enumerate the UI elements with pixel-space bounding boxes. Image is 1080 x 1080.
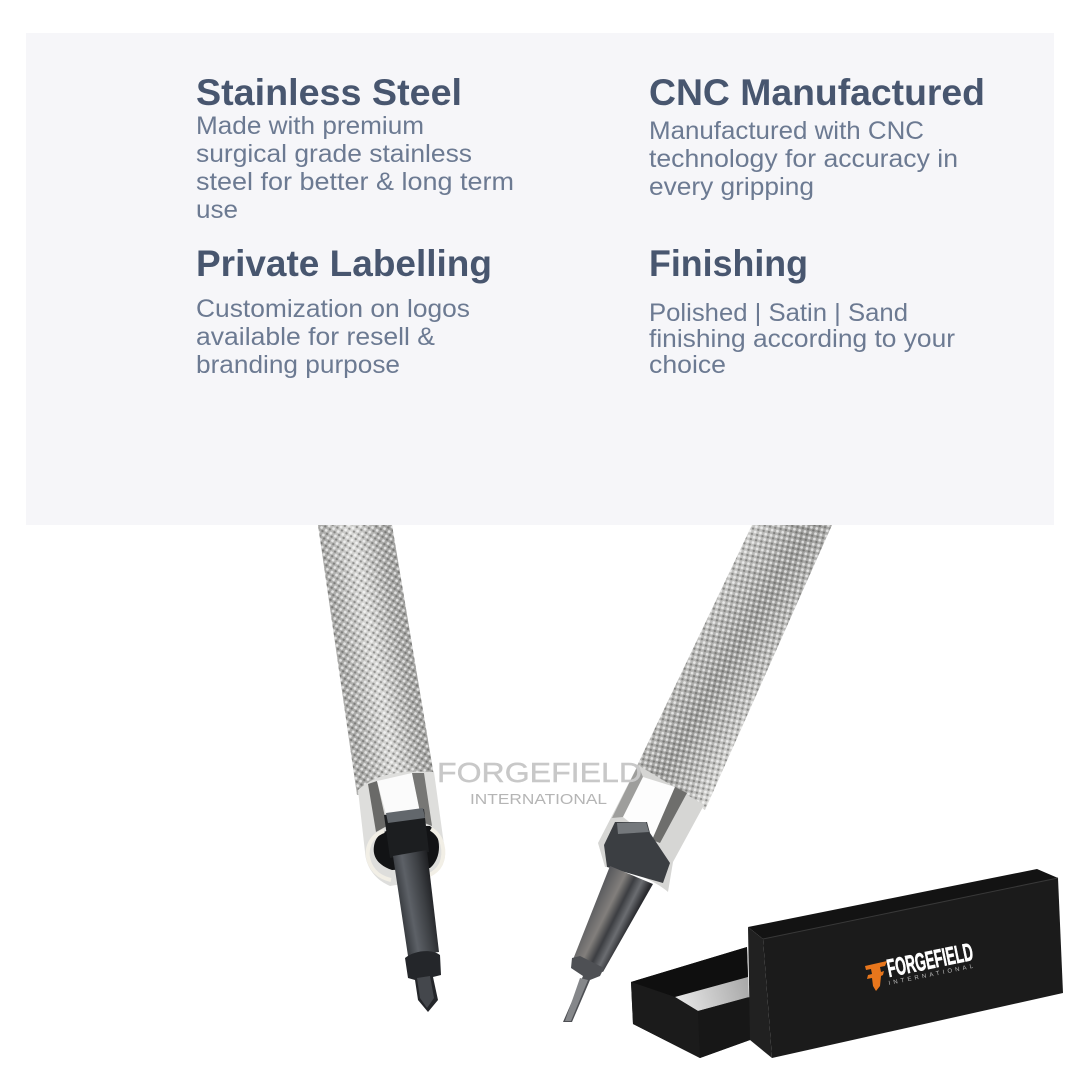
logo name: FORGEFIELD	[885, 938, 975, 983]
right metal collar	[598, 765, 704, 892]
description	[196, 295, 470, 379]
feature: cnc manufactured	[649, 72, 985, 201]
panel: features	[26, 33, 1054, 525]
description: every gripping	[649, 173, 814, 201]
logo subtitle: INTERNATIONAL	[888, 964, 974, 987]
box lid	[748, 869, 1063, 1058]
description	[196, 112, 514, 224]
left collar opening	[374, 826, 439, 870]
description: choice	[649, 351, 726, 379]
description: technology for accuracy in	[649, 145, 958, 173]
feature: private labelling	[196, 243, 492, 379]
black gift box	[631, 869, 1063, 1058]
feature: stainless steel	[196, 72, 514, 224]
right knurled handle	[636, 525, 832, 810]
description: available for resell &	[196, 323, 435, 351]
description: Customization on logos	[196, 295, 470, 323]
right shaft	[572, 866, 653, 972]
heading: CNC Manufactured	[649, 72, 985, 113]
description: surgical grade stainless	[196, 140, 472, 168]
description: Made with premium	[196, 112, 424, 140]
description: steel for better & long term	[196, 168, 514, 196]
watermark subtitle: INTERNATIONAL	[470, 791, 607, 808]
heading: Stainless Steel	[196, 72, 462, 113]
watermark	[437, 757, 642, 808]
right screwdriver	[563, 525, 832, 1022]
left knurled handle	[318, 525, 435, 795]
description: Manufactured with CNC	[649, 117, 924, 145]
left tip	[405, 951, 441, 1012]
description	[649, 117, 958, 201]
right hex nut	[604, 822, 670, 883]
right tip	[563, 956, 604, 1022]
watermark name: FORGEFIELD	[437, 757, 642, 788]
description: branding purpose	[196, 351, 400, 379]
left screwdriver	[318, 525, 445, 1012]
description	[649, 299, 955, 379]
left shaft	[393, 850, 439, 956]
left hex nut	[384, 809, 429, 858]
box base	[631, 947, 750, 1058]
box logo	[865, 938, 975, 991]
logo icon: orange F	[865, 961, 887, 991]
heading: Private Labelling	[196, 243, 492, 284]
heading: Finishing	[649, 243, 808, 284]
description: use	[196, 196, 238, 224]
feature: finishing	[649, 243, 955, 379]
description: Polished | Satin | Sand	[649, 299, 908, 327]
description: finishing according to your	[649, 325, 955, 353]
left metal collar	[358, 772, 445, 886]
left ring rim	[368, 831, 391, 880]
